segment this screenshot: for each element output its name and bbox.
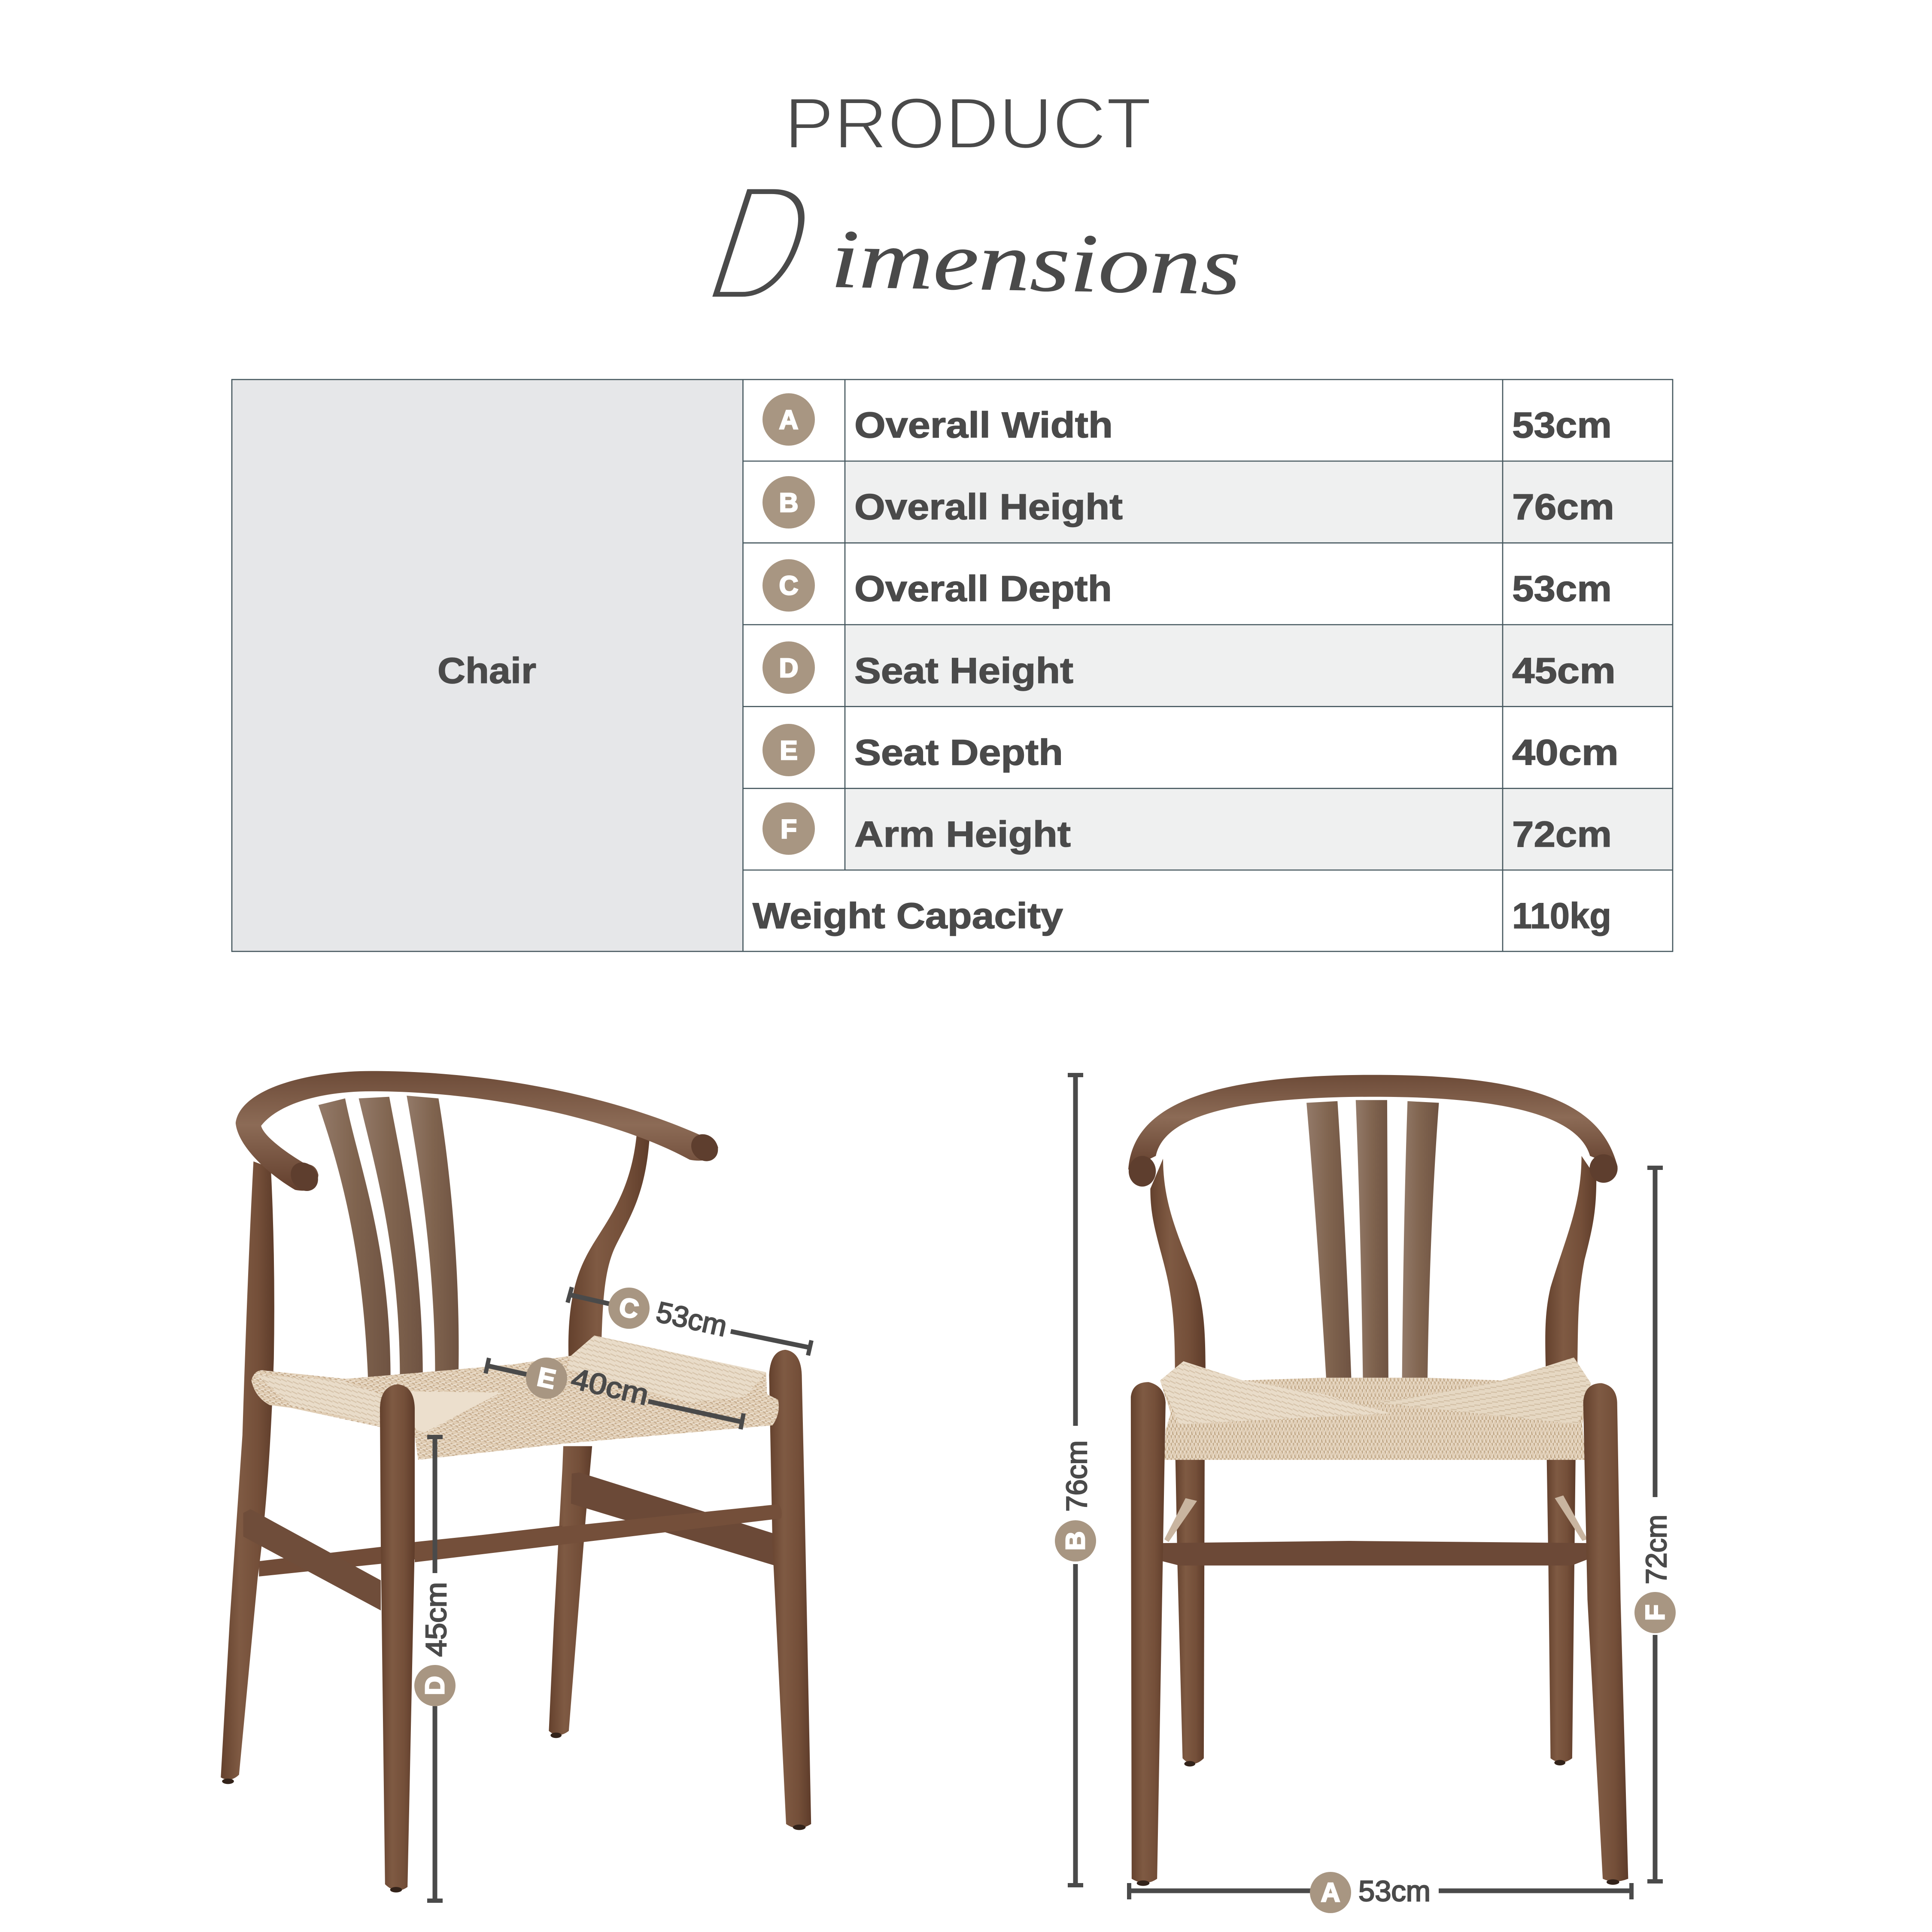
- dimension D: 45cm seat height: D: [420, 1676, 450, 1695]
- row F: arm height: Arm Height: [854, 814, 1071, 854]
- dimension B: 76cm overall height: B: [1061, 1531, 1091, 1550]
- dimension A: 53cm overall width: 53cm: [1358, 1875, 1431, 1908]
- dimension A: 53cm overall width: [1129, 1872, 1631, 1913]
- dimension A: 53cm overall width: A: [1321, 1878, 1340, 1908]
- row F: arm height: [762, 802, 1612, 855]
- illustration: chair front view: [1128, 1075, 1628, 1886]
- dimension F: 72cm arm height: F: [1640, 1604, 1670, 1621]
- dimension E: 40cm seat depth: E: [535, 1362, 558, 1395]
- row C: overall depth: 53cm: [1512, 568, 1612, 609]
- row: weight capacity: Weight Capacity: [753, 896, 1063, 936]
- row A: overall width: [762, 393, 1612, 446]
- dimension C: 53cm depth: C: [617, 1292, 641, 1325]
- panel: chair category cell: Chair: [437, 650, 536, 691]
- row F: arm height: 72cm: [1512, 814, 1612, 854]
- row A: overall width: A: [779, 405, 798, 435]
- title: PRODUCT: PRODUCT: [784, 83, 1151, 164]
- row E: seat depth: 40cm: [1512, 732, 1619, 772]
- row C: overall depth: [762, 559, 1612, 611]
- row D: seat height: 45cm: [1512, 650, 1616, 691]
- dimension C: 53cm depth: 53cm: [653, 1295, 730, 1343]
- row: weight capacity: [753, 896, 1611, 936]
- row B: overall height: 76cm: [1512, 487, 1614, 527]
- row C: overall depth: Overall Depth: [854, 568, 1112, 609]
- row D: seat height: D: [779, 653, 798, 683]
- dimension D: 45cm seat height: [414, 1437, 456, 1901]
- panel: chair category cell: [232, 380, 743, 951]
- row B: overall height: [762, 476, 1614, 529]
- row E: seat depth: [762, 724, 1619, 776]
- dimension B: 76cm overall height: [1055, 1075, 1096, 1885]
- heading: Dimensions script: D: [686, 149, 839, 336]
- row B: overall height: Overall Height: [854, 487, 1123, 527]
- dimension F: 72cm arm height: 72cm: [1640, 1515, 1673, 1584]
- row E: seat depth: E: [780, 736, 798, 766]
- heading: Dimensions script: [686, 149, 1242, 336]
- dimension E: 40cm seat depth: [486, 1358, 744, 1429]
- specification table: [232, 380, 1673, 951]
- row: weight capacity: 110kg: [1512, 896, 1611, 936]
- dimension C: 53cm depth: [568, 1287, 811, 1355]
- row A: overall width: 53cm: [1512, 405, 1612, 445]
- dimension D: 45cm seat height: 45cm: [420, 1582, 453, 1657]
- row D: seat height: Seat Height: [854, 650, 1073, 691]
- dimension E: 40cm seat depth: 40cm: [568, 1362, 652, 1412]
- row E: seat depth: Seat Depth: [854, 732, 1063, 772]
- dimension B: 76cm overall height: 76cm: [1060, 1440, 1093, 1512]
- illustration: chair three-quarter view: [221, 1071, 811, 1893]
- row F: arm height: F: [781, 814, 797, 844]
- dimension F: 72cm arm height: [1634, 1168, 1676, 1881]
- row D: seat height: [762, 641, 1616, 694]
- table row shading: [845, 461, 1673, 870]
- row C: overall depth: C: [779, 571, 798, 601]
- heading: Dimensions script: imensions: [830, 213, 1242, 313]
- row A: overall width: Overall Width: [854, 405, 1113, 445]
- row B: overall height: B: [779, 488, 798, 518]
